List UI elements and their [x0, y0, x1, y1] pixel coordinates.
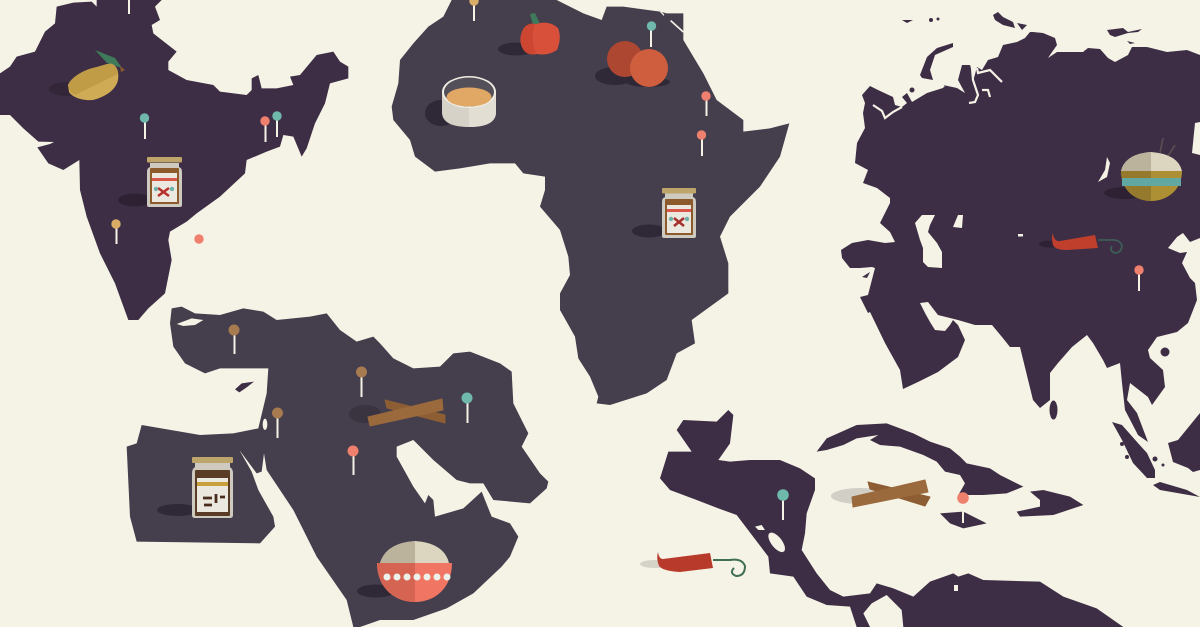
islands: Southeast Asia: [862, 272, 1200, 497]
pin: Iran teal: [462, 392, 472, 423]
pin: east India teal: [272, 111, 282, 137]
icon: mango: [49, 50, 125, 100]
map: Middle East and Egypt: [127, 307, 548, 627]
pin: east India coral: [260, 116, 270, 142]
icon: bowl of grains: [425, 76, 496, 127]
icon: red chili pepper (Pacific): [640, 552, 745, 576]
pin: China coral: [1134, 265, 1144, 291]
map: India: [0, 0, 348, 320]
pin: Saudi coral: [348, 446, 358, 475]
pin: central India teal: [140, 113, 149, 139]
pin: north India: [128, 0, 130, 14]
pin: north Africa tan: [469, 0, 479, 21]
icon: red bell pepper: [498, 13, 560, 56]
pin: Sudan coral: [701, 91, 711, 116]
icon: two tomatoes: [595, 41, 670, 87]
pin: Ethiopia coral: [697, 130, 706, 156]
map pins: [111, 0, 1144, 523]
pin: south India tan: [111, 219, 121, 244]
map: Central America and Caribbean: [660, 410, 1123, 627]
icon: spice jar (East Africa): [632, 188, 696, 238]
icon: red chili pepper (Central Asia): [1039, 233, 1122, 253]
icon: bowl with chopsticks (China): [1104, 138, 1182, 201]
icon: cinnamon sticks (Caribbean): [831, 480, 930, 507]
pin: Egypt teal: [647, 21, 656, 47]
island: Jamaica: [940, 512, 987, 528]
icon: spice jar with cloves (Egypt): [157, 457, 233, 518]
pin: Israel brown: [272, 408, 283, 438]
island: Cuba: [817, 423, 1023, 495]
pin: Turkey brown: [228, 324, 240, 354]
icon: spice jar (India): [118, 157, 182, 207]
islands: Arctic: [902, 12, 1142, 92]
inland seas and gulfs of Asia: [873, 68, 1110, 268]
icon: cinnamon sticks (Middle East): [349, 399, 445, 426]
map: Asia: [841, 12, 1200, 497]
icon: bowl with rice (Arabia): [357, 541, 452, 602]
pin: Honduras teal: [777, 489, 789, 520]
island: Hispaniola: [1017, 490, 1083, 517]
pin: Iraq brown: [356, 366, 367, 397]
map: Africa: [392, 0, 789, 405]
pin: Bay of Bengal coral: [194, 234, 204, 244]
pin: Jamaica coral: [957, 492, 969, 523]
